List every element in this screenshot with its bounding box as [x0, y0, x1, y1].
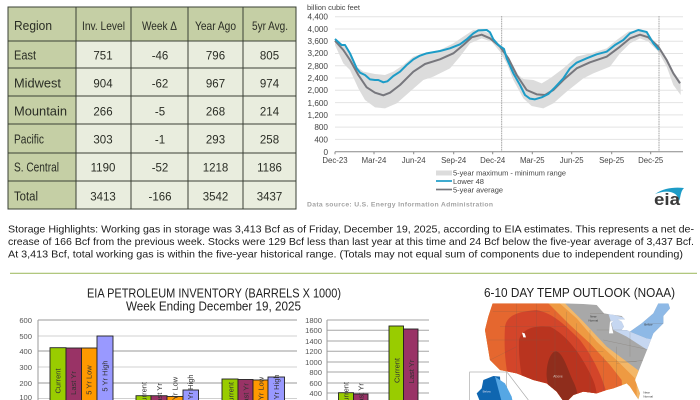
table row: Total: -166 [148, 192, 172, 204]
table row: Mountain: 214 [260, 106, 280, 118]
bar group B [389, 326, 418, 400]
x axis: Jun-25 [560, 156, 584, 165]
y axis labels: 1800 [305, 316, 322, 325]
y axis labels: 600 [19, 316, 32, 325]
below normal blue [630, 304, 670, 340]
y axis labels: 0 [323, 148, 328, 157]
plot lines [335, 16, 681, 152]
table row: Total: Total [14, 188, 38, 204]
above normal red [505, 310, 607, 400]
bar group A [338, 381, 368, 400]
icon: eia logo [654, 188, 684, 209]
y axis labels: 1,600 [308, 99, 328, 108]
table row: Pacific: -1 [155, 134, 165, 146]
y axis labels [305, 316, 322, 398]
x axis: Mar-25 [520, 156, 545, 165]
x axis: Sep-25 [599, 156, 625, 165]
map labels: Near [590, 315, 597, 319]
y axis labels: 800 [314, 123, 328, 132]
heading: petroleum inventory: Week Ending December 19, 2025 [126, 300, 301, 314]
bar group 1: 5 Yr High [100, 360, 110, 392]
table row: S. Central: 1190 [91, 162, 115, 174]
y axis labels: 1600 [305, 326, 322, 335]
panel: working gas storage line chart [307, 3, 684, 209]
table row: East: 751 [93, 50, 113, 62]
high probability dark red [519, 326, 597, 400]
heading: temperature outlook: 6-10 DAY TEMP OUTLOOK (NOAA) [484, 286, 675, 300]
y axis labels [19, 316, 32, 400]
table row: East: -46 [152, 50, 168, 62]
table row: Midwest: -62 [152, 78, 168, 90]
table row: Mountain [14, 104, 280, 118]
map labels: Above [553, 375, 563, 379]
y axis labels: 400 [314, 136, 328, 144]
panel: regional storage table [8, 7, 296, 209]
chart unit label: billion cubic feet [307, 3, 360, 12]
y axis labels: 1,200 [308, 111, 328, 120]
table row: Mountain: 266 [93, 106, 113, 118]
table row: Pacific: 258 [260, 134, 279, 146]
inset: Alaska: Below [483, 390, 492, 394]
table row: East: 796 [206, 50, 225, 62]
chart legend: 5-year maximum - minimum range [453, 168, 566, 178]
chart legend [436, 168, 566, 194]
map: 6-10 day temperature outlook [470, 300, 677, 400]
y axis labels: 4,400 [308, 12, 328, 22]
table row: Total: 3542 [203, 192, 228, 204]
table header row: Inv. Level [82, 19, 125, 33]
heading: petroleum inventory: EIA PETROLEUM INVENTORY (BARRELS X 1000) [87, 286, 341, 300]
table row: Total: 3437 [257, 192, 282, 204]
bar group B: Last Yr [407, 359, 416, 383]
y axis labels: 1400 [305, 337, 322, 346]
table header row [14, 18, 288, 33]
text block: storage highlights: Storage Highlights: Working gas in storage was 3,413 Bcf as of Friday, December 19, 2025, according to EIA estimates. This represents a net de- [8, 224, 694, 235]
x axis: Dec-25 [638, 156, 664, 165]
bar group 1: Current [54, 368, 62, 394]
y axis labels: 2,000 [308, 86, 328, 95]
bar group 1: Last Yr [69, 371, 78, 395]
text block: storage highlights [8, 224, 694, 260]
table header row: Region [14, 18, 52, 33]
y axis labels: 2,800 [308, 62, 328, 71]
table row: S. Central: 1218 [203, 162, 228, 174]
near normal band pale orange [485, 303, 640, 400]
table row: Mountain: 268 [206, 106, 225, 118]
table row: Midwest: 904 [93, 78, 113, 90]
map labels: Below [644, 323, 653, 327]
icon: eia logo: eia [654, 191, 681, 209]
5-year range band [335, 30, 681, 108]
above normal orange [477, 300, 623, 400]
inset: Alaska [470, 372, 528, 400]
y axis labels: 600 [309, 379, 322, 388]
table row: Mountain: Mountain [14, 104, 67, 118]
5-year average line [335, 35, 680, 95]
bar group 1: 5 Yr Low [84, 365, 94, 395]
data source note: Data source: U.S. Energy Information Administration [307, 202, 493, 208]
y axis labels: 200 [19, 379, 32, 388]
table row: Pacific: 293 [206, 134, 225, 146]
table row: S. Central [14, 160, 282, 174]
y axis labels: 800 [309, 368, 322, 377]
y axis labels: 3,200 [308, 49, 328, 58]
map labels: Normal [589, 318, 598, 322]
table row: East: East [14, 48, 36, 62]
table row: Mountain: -5 [155, 106, 165, 118]
table row: East: 805 [260, 50, 279, 62]
table row: Midwest: Midwest [14, 76, 61, 90]
y axis labels: 300 [19, 363, 32, 372]
x axis: Dec-23 [322, 156, 348, 165]
Lower 48 line [335, 30, 659, 99]
heading: petroleum inventory [87, 286, 341, 314]
x axis: Dec-24 [480, 156, 506, 165]
table row: Midwest [14, 76, 280, 90]
table row: Total [14, 188, 282, 204]
year divider lines [502, 16, 659, 152]
map labels [553, 315, 653, 398]
bar group 2 [136, 374, 198, 400]
map labels: Normal [643, 394, 653, 398]
y axis labels: 500 [19, 332, 32, 341]
chart legend: Lower 48 [453, 177, 484, 186]
y axis labels: 400 [309, 389, 322, 398]
marker: white salt lake [522, 333, 526, 337]
x axis [322, 152, 683, 165]
y axis labels: 400 [19, 347, 32, 356]
table header row: Week Δ [142, 19, 177, 33]
x axis: Jun-24 [402, 156, 426, 165]
bar group 3 [222, 374, 284, 400]
map labels: Near [643, 390, 650, 394]
x axis: Sep-24 [441, 156, 467, 165]
y axis labels: 3,600 [308, 37, 328, 46]
text block: storage highlights: At 3,413 Bcf, total working gas is within the five-year historical range. (Totals may not equal sum of components due to independent rounding) [8, 249, 683, 260]
x axis: Mar-24 [362, 156, 387, 165]
y axis labels: 1200 [305, 347, 322, 356]
bar group B: Current [392, 357, 402, 383]
table row: Total: 3413 [90, 192, 116, 204]
table row: S. Central: 1186 [257, 162, 282, 174]
table row: S. Central: S. Central [14, 160, 59, 174]
y axis labels: 2,400 [308, 74, 328, 83]
table row: Midwest: 967 [206, 78, 225, 90]
below normal light blue [608, 313, 652, 352]
text block: storage highlights: crease of 166 Bcf from the previous week. Stocks were 129 Bcf less than last year at this time and 24 Bcf below the five-year average of 3,437 Bcf. [8, 237, 694, 248]
table row: Pacific [14, 132, 279, 146]
bar group 1 [50, 336, 113, 400]
very high probability [547, 351, 578, 400]
y axis labels: 1000 [305, 358, 322, 367]
table row: S. Central: -52 [152, 162, 168, 174]
bar chart: petroleum inventory left [19, 316, 297, 400]
y axis labels [308, 12, 328, 157]
table row: Pacific: Pacific [14, 132, 44, 146]
table row: Pacific: 303 [93, 134, 113, 146]
table row: Midwest: 974 [260, 78, 280, 90]
table header row: Year Ago [195, 19, 236, 33]
bar chart: petroleum inventory right [305, 316, 429, 400]
chart legend: 5-year average [453, 186, 503, 194]
table row: East [14, 48, 279, 62]
table header row: 5yr Avg. [252, 19, 288, 33]
y axis labels: 4,000 [308, 25, 328, 34]
